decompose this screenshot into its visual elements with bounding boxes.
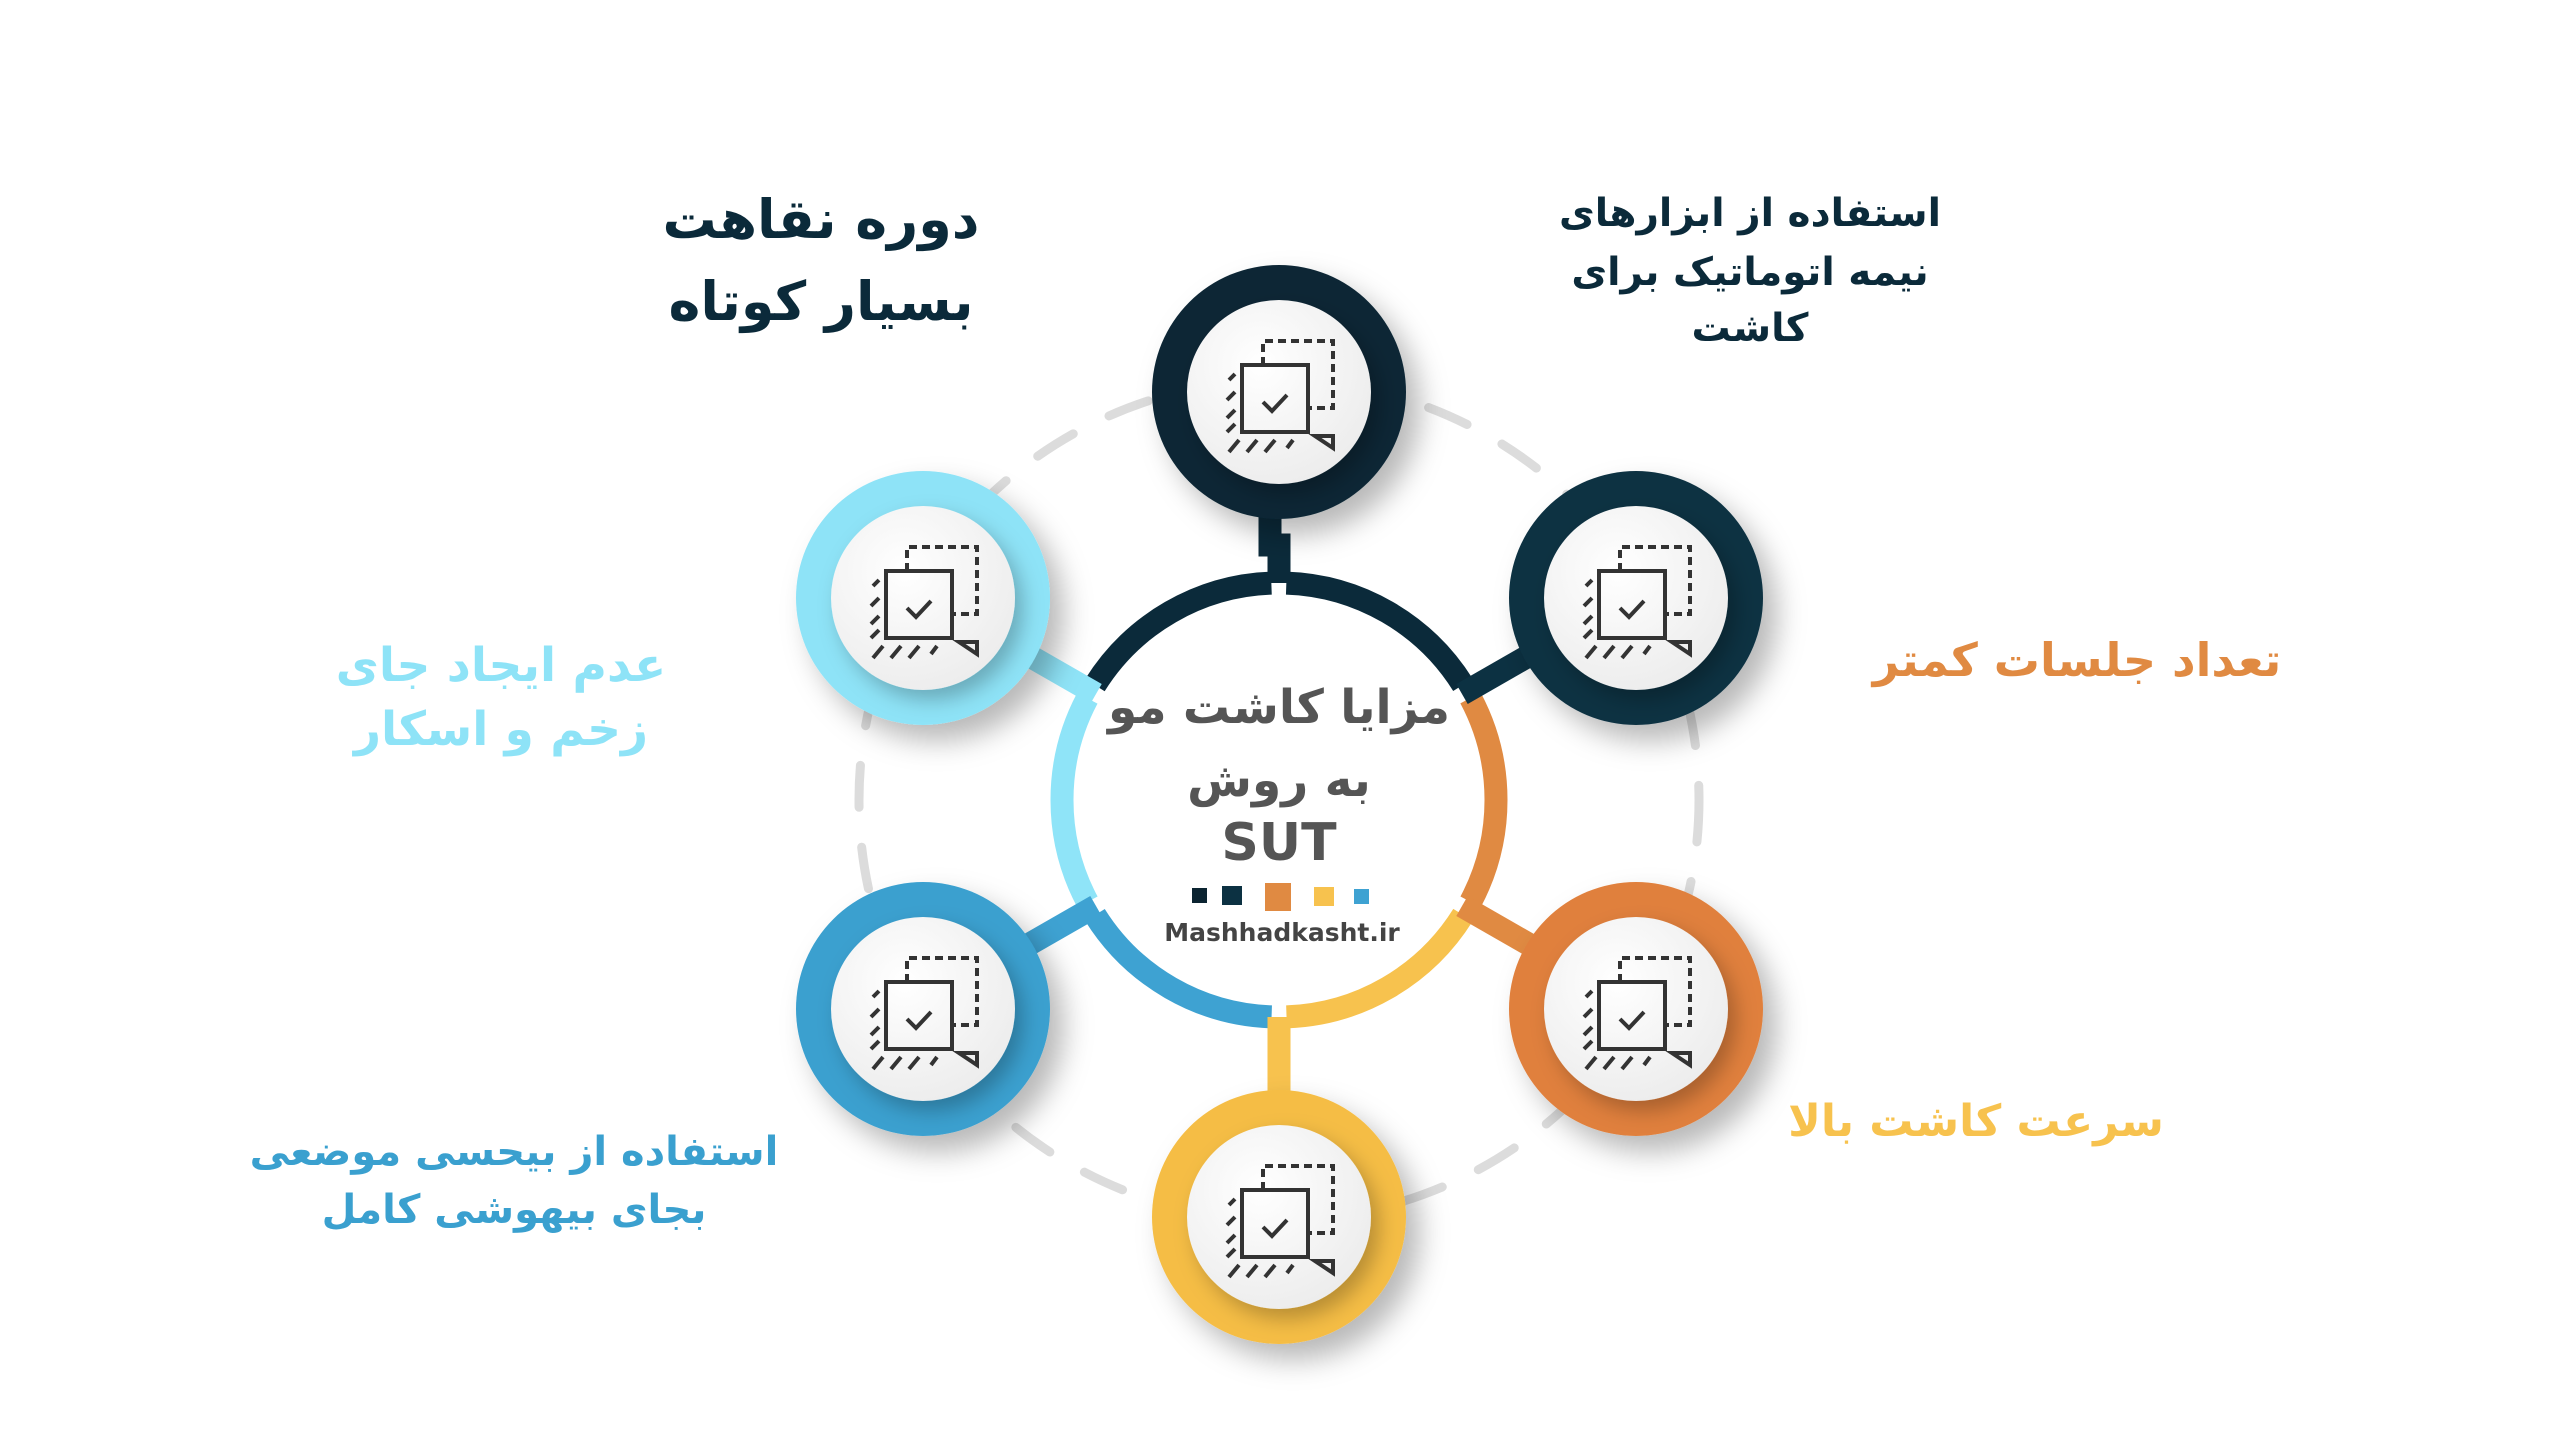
label: left light blue: عدم ایجاد جای <box>336 638 666 693</box>
label: bottom left blue <box>250 1129 778 1233</box>
center title: SUT <box>1221 813 1337 873</box>
dashed outer circle <box>859 380 1699 1220</box>
node: bottom <box>1152 1090 1406 1344</box>
node: lower left <box>796 882 1050 1136</box>
label: left light blue: زخم و اسکار <box>352 702 648 757</box>
center title: مزایا کاشت مو <box>1106 680 1450 735</box>
central ring <box>1028 505 1530 1095</box>
center title: به روش <box>1187 753 1371 808</box>
node: top <box>1152 265 1406 519</box>
label: top right <box>1559 191 1941 351</box>
center title <box>1106 680 1450 873</box>
label: top right: استفاده از ابزارهای <box>1559 191 1941 236</box>
label: top right: کاشت <box>1692 306 1809 351</box>
label: left light blue <box>336 638 666 757</box>
label: right orange: تعداد جلسات کمتر <box>1871 633 2281 687</box>
label: top left <box>662 188 980 333</box>
label: top right: نیمه اتوماتیک برای <box>1571 250 1929 295</box>
connectors <box>1270 505 1279 583</box>
label: bottom left blue: استفاده از بیحسی موضعی <box>250 1129 778 1175</box>
label: bottom left blue: بجای بیهوشی کامل <box>322 1187 706 1233</box>
label: top left: بسیار کوتاه <box>668 270 974 333</box>
website label: Mashhadkasht.ir <box>1164 918 1400 947</box>
label: bottom right yellow: سرعت کاشت بالا <box>1788 1096 2164 1147</box>
color squares <box>1192 883 1369 911</box>
label: top left: دوره نقاهت <box>662 188 980 251</box>
node: lower right <box>1509 882 1763 1136</box>
node: upper left <box>796 471 1050 725</box>
node: upper right <box>1509 471 1763 725</box>
